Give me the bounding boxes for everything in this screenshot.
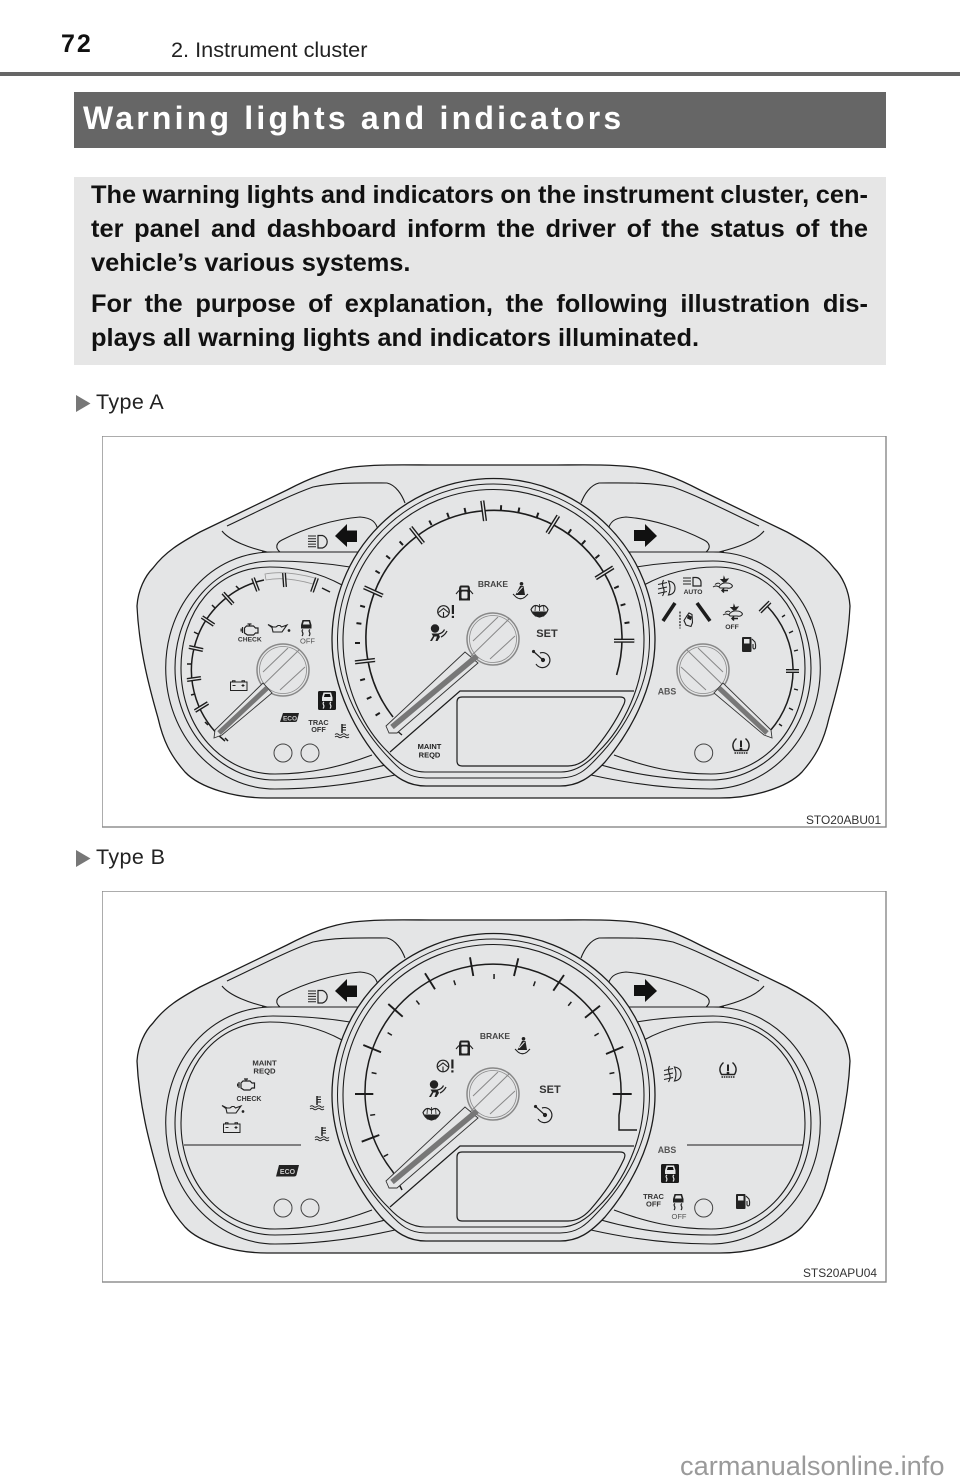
intro text: vehicle’s various systems. bbox=[91, 249, 410, 277]
icon: slip indicator bbox=[661, 1164, 679, 1183]
header rule bbox=[0, 72, 960, 76]
speedometer scale bbox=[355, 957, 637, 1190]
cluster housing bbox=[102, 436, 886, 827]
icon: ECO: ECO bbox=[280, 1169, 296, 1176]
intro text: ter panel and dashboard inform the driver of the status of the bbox=[91, 215, 868, 243]
icon: fog light bbox=[658, 580, 675, 596]
cluster housing bbox=[102, 891, 886, 1282]
label: MAINT REQD: REQD bbox=[253, 1066, 276, 1076]
icon: cruise bbox=[532, 650, 550, 668]
icon: skid control off: OFF bbox=[725, 624, 739, 631]
icon: slip off: OFF bbox=[672, 1212, 687, 1221]
icon: coolant cold bbox=[315, 1127, 329, 1141]
label: TRAC OFF: OFF bbox=[311, 725, 326, 734]
icon: battery bbox=[230, 681, 247, 690]
icon: cruise bbox=[534, 1106, 552, 1123]
icon: steering warning bbox=[437, 1060, 454, 1072]
right gauge dial bbox=[677, 644, 772, 738]
icon: fuel bbox=[742, 637, 756, 652]
intro text bbox=[91, 181, 868, 352]
icon: ECO: ECO bbox=[283, 716, 297, 722]
icon: seat belt bbox=[513, 582, 528, 599]
icon: check engine: CHECK bbox=[238, 636, 262, 644]
icon: slip indicator bbox=[318, 691, 336, 710]
intro text: The warning lights and indicators on the instrument cluster, cen- bbox=[91, 181, 868, 209]
page number: 72 bbox=[61, 30, 93, 58]
panel: type A cluster bbox=[102, 436, 887, 828]
running header: 2. Instrument cluster bbox=[171, 37, 367, 62]
left divider bbox=[184, 1144, 301, 1146]
icon: tire pressure bbox=[733, 738, 749, 753]
icon: auto headlight bbox=[683, 578, 702, 596]
icon: steering warning bbox=[438, 605, 454, 618]
icon: washer bbox=[423, 1107, 440, 1120]
icon: slip off bbox=[300, 620, 315, 646]
figure code: STS20APU04 bbox=[803, 1266, 877, 1280]
label: TRAC OFF: OFF bbox=[646, 1200, 661, 1208]
title bar bbox=[74, 92, 886, 148]
icon: airbag bbox=[430, 624, 447, 641]
icon: door ajar bbox=[456, 586, 473, 600]
right divider bbox=[687, 1144, 803, 1146]
icon: lane departure bbox=[680, 612, 692, 628]
left gauge scale bbox=[187, 573, 330, 741]
speedometer dial bbox=[386, 1068, 519, 1188]
panel: type B cluster bbox=[102, 891, 887, 1283]
label: TRAC OFF: TRAC bbox=[308, 718, 329, 727]
icon: coolant hot bbox=[310, 1096, 324, 1110]
label: ABS: ABS bbox=[658, 686, 676, 696]
icon: seat belt bbox=[515, 1037, 530, 1054]
label: ABS: ABS bbox=[658, 1145, 676, 1155]
icon: coolant temperature bbox=[335, 724, 349, 738]
icon: check engine bbox=[238, 624, 262, 644]
icon: auto headlight: AUTO bbox=[684, 589, 702, 596]
watermark: carmanualsonline.info bbox=[680, 1450, 944, 1481]
icon: slip off bbox=[672, 1194, 687, 1221]
left gauge dial bbox=[214, 644, 309, 738]
icon: check engine: CHECK bbox=[237, 1096, 261, 1103]
label: BRAKE: BRAKE bbox=[480, 1031, 510, 1041]
label: TRAC OFF: TRAC bbox=[643, 1192, 664, 1201]
icon: ECO bbox=[276, 1165, 299, 1176]
icon: tire pressure bbox=[720, 1062, 736, 1077]
icon: check engine bbox=[237, 1079, 261, 1103]
icon: ECO bbox=[280, 713, 299, 722]
intro text: For the purpose of explanation, the following illustration dis- bbox=[91, 290, 868, 318]
icon: door ajar bbox=[456, 1040, 473, 1056]
right gauge scale bbox=[663, 602, 799, 731]
icon: skid control bbox=[713, 577, 732, 592]
intro panel bbox=[74, 177, 886, 365]
icon: skid control off bbox=[723, 605, 742, 631]
figure code: STO20ABU01 bbox=[806, 813, 882, 827]
icon: fog light bbox=[664, 1066, 681, 1082]
icon: fuel bbox=[736, 1194, 750, 1209]
speedometer scale bbox=[355, 501, 634, 735]
icon: washer bbox=[531, 604, 548, 617]
icon: slip off: OFF bbox=[300, 636, 315, 646]
label: BRAKE: BRAKE bbox=[478, 579, 508, 589]
intro text: plays all warning lights and indicators illuminated. bbox=[91, 324, 699, 352]
title bar: Warning lights and indicators bbox=[83, 100, 624, 136]
icon: oil pressure bbox=[268, 624, 290, 632]
icon: airbag bbox=[429, 1080, 446, 1097]
label: SET: SET bbox=[536, 628, 558, 640]
label: MAINT REQD: MAINT bbox=[252, 1058, 277, 1068]
label: MAINT REQD: MAINT bbox=[418, 742, 441, 751]
label: SET: SET bbox=[539, 1084, 561, 1096]
Type B label: Type B bbox=[96, 845, 165, 869]
label: MAINT REQD: REQD bbox=[419, 750, 441, 760]
Type A label: Type A bbox=[96, 390, 164, 414]
icon: battery bbox=[224, 1123, 240, 1132]
speedometer dial bbox=[386, 613, 519, 733]
icon: oil pressure bbox=[222, 1106, 244, 1113]
